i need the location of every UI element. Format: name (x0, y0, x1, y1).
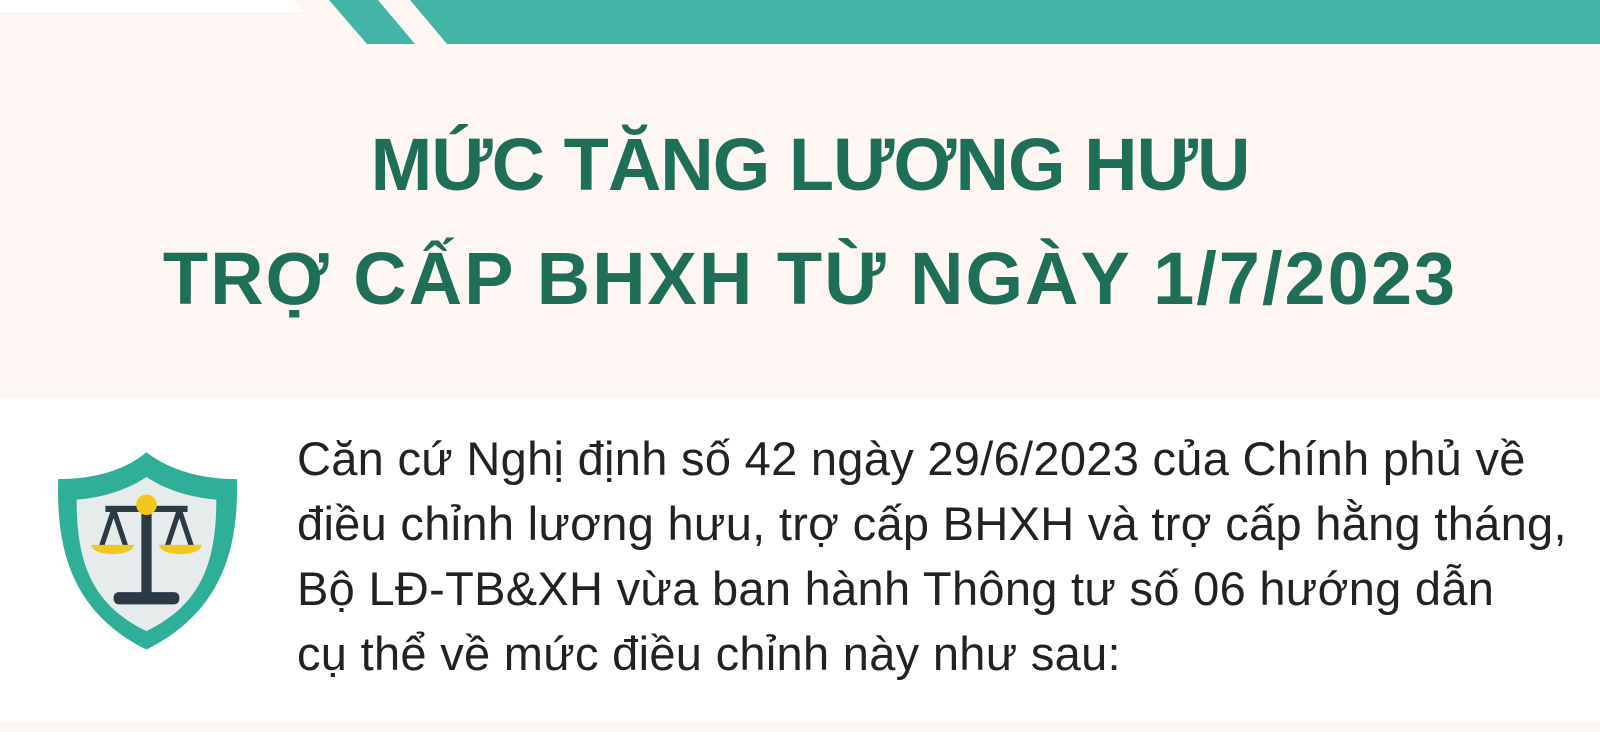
intro text: điều chỉnh lương hưu, trợ cấp BHXH và trợ cấp hằng tháng, (297, 497, 1567, 550)
intro text: cụ thể về mức điều chỉnh này như sau: (297, 627, 1121, 680)
intro text: Bộ LĐ-TB&XH vừa ban hành Thông tư số 06 hướng dẫn (297, 562, 1494, 615)
title: MỨC TĂNG LƯƠNG HƯU (371, 123, 1249, 206)
icon: shield with scales (58, 452, 237, 650)
intro text (297, 432, 1567, 680)
title: TRỢ CẤP BHXH TỪ NGÀY 1/7/2023 (163, 237, 1457, 320)
intro text: Căn cứ Nghị định số 42 ngày 29/6/2023 của Chính phủ về (297, 432, 1526, 485)
title (163, 123, 1457, 320)
header background (0, 0, 1600, 398)
top-left white strip (0, 0, 302, 12)
bottom strip (0, 722, 1600, 732)
top teal stripes (329, 0, 1600, 44)
